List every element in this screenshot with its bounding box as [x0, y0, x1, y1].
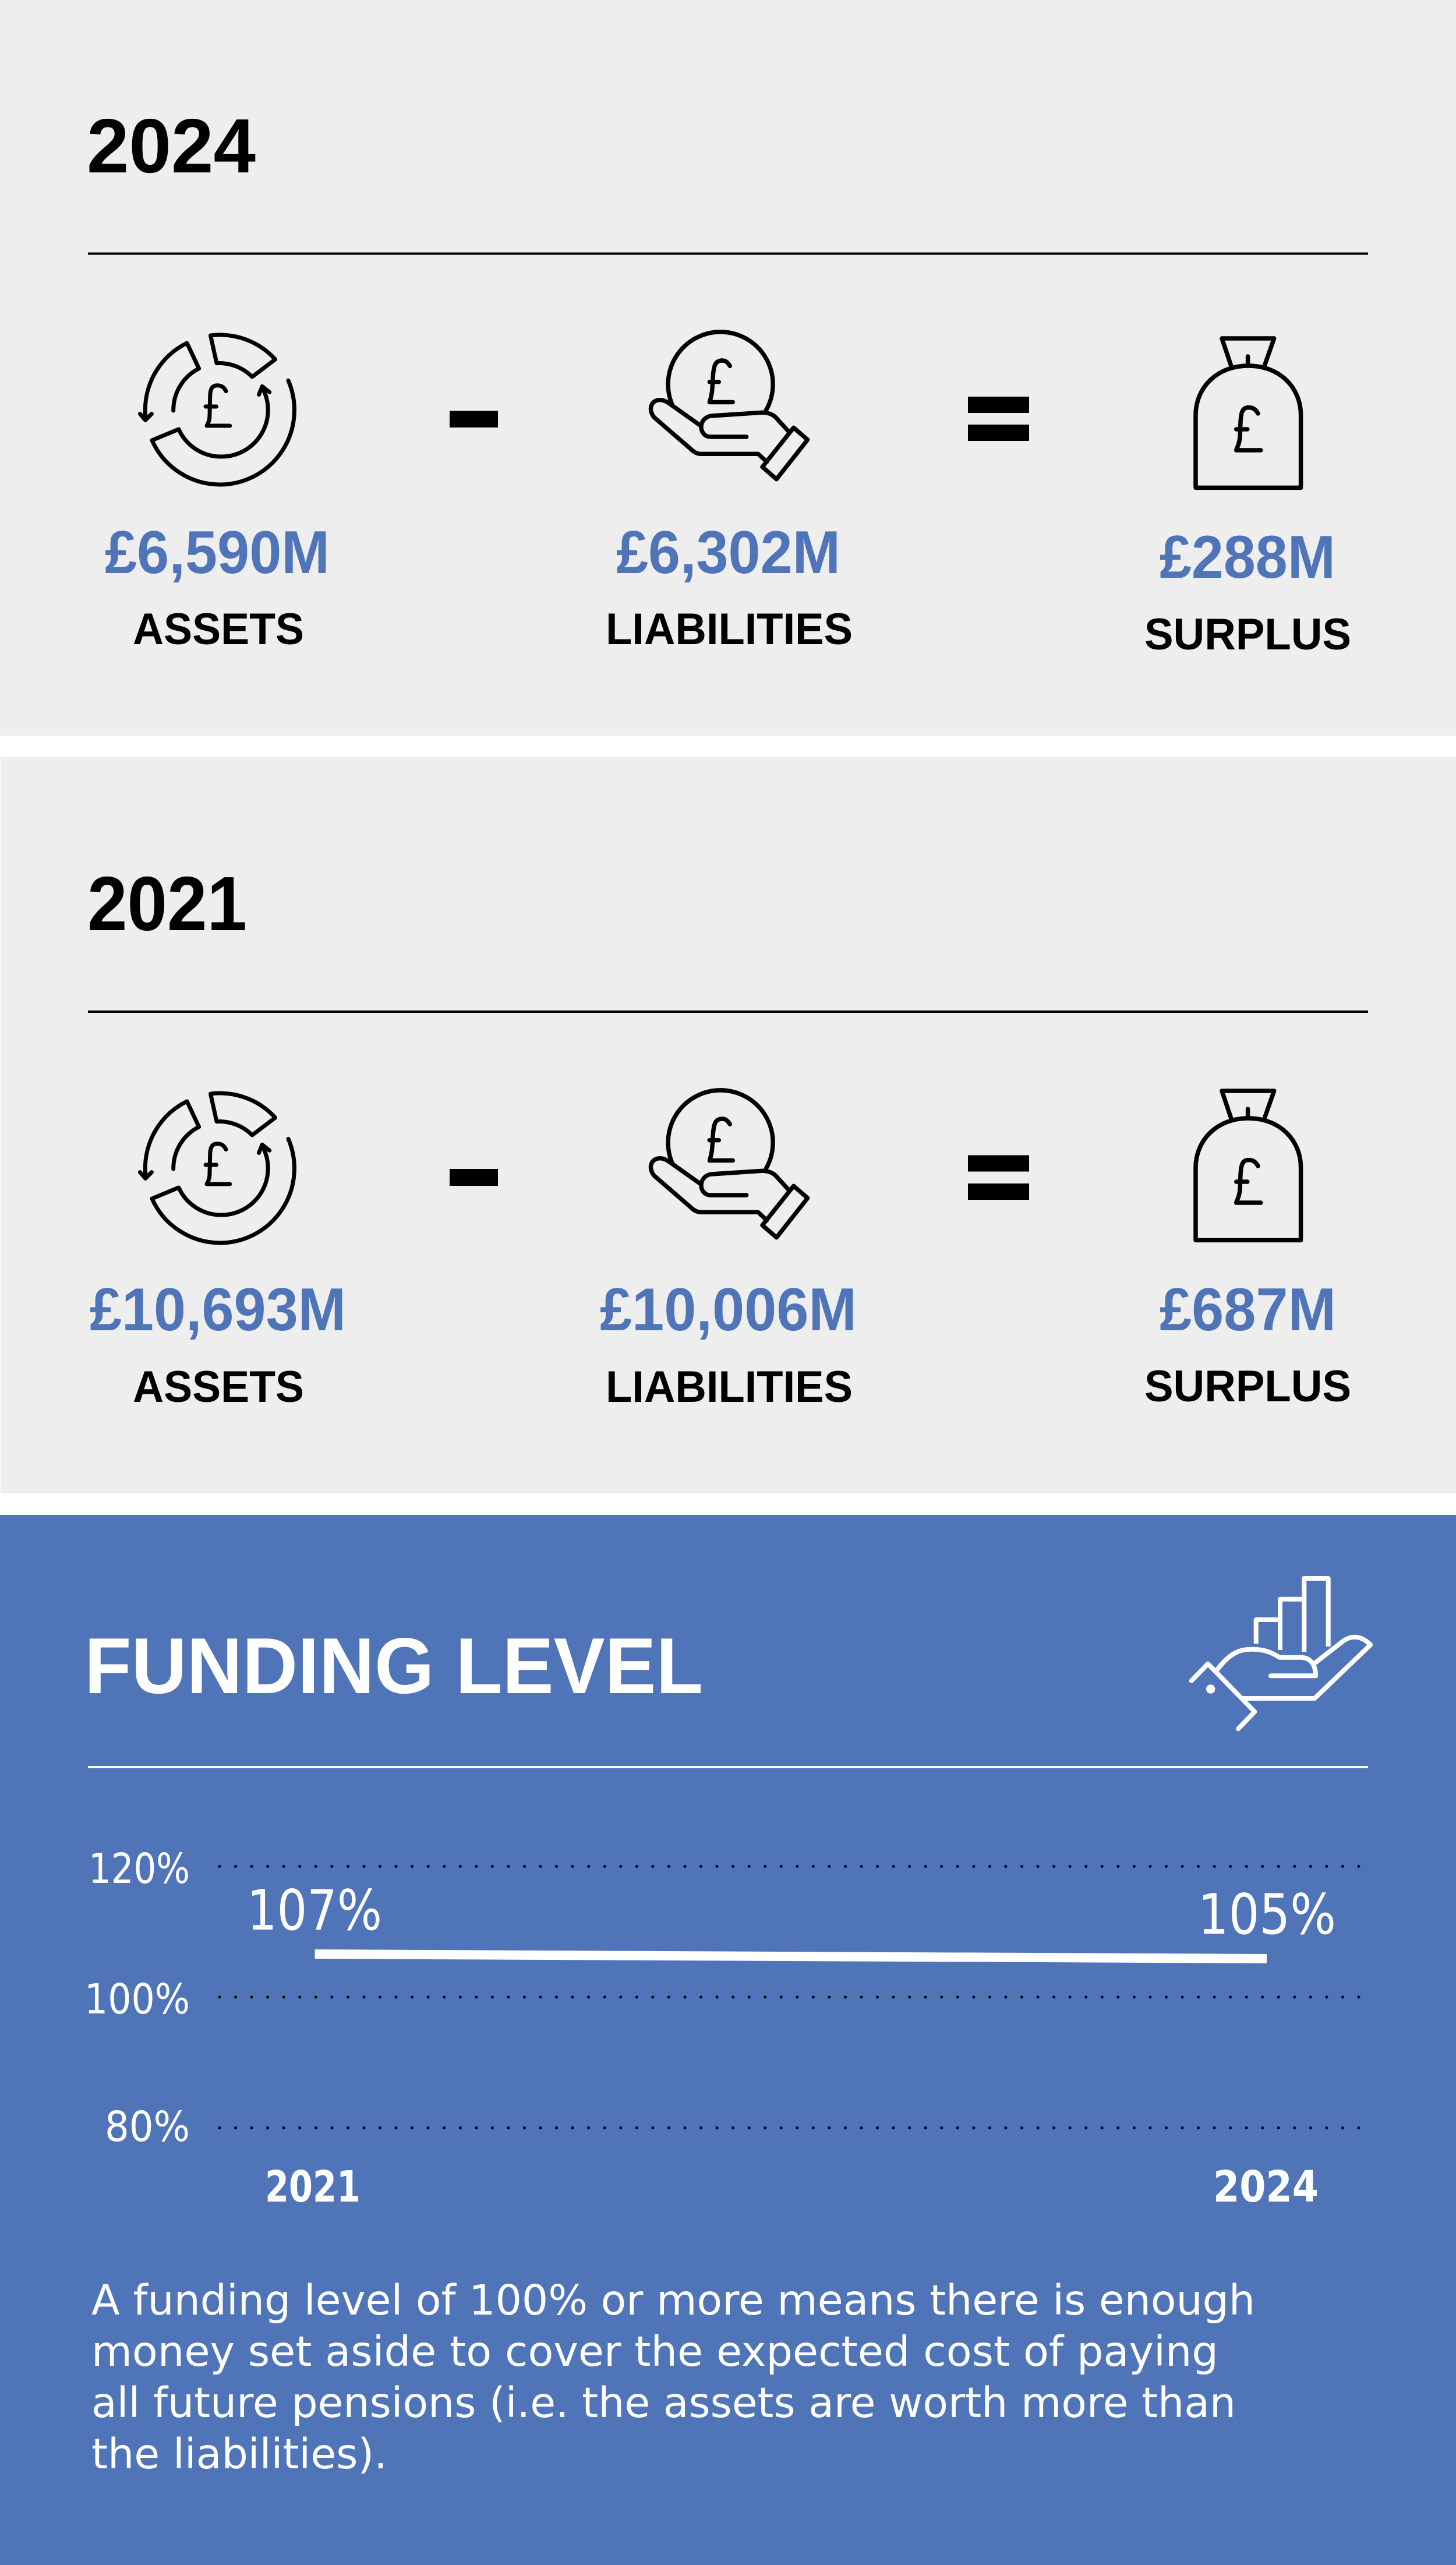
x label: 2021: 2021: [265, 2162, 361, 2212]
value: assets 2021: £10,693M: [90, 1276, 346, 1344]
value: surplus 2021: £687M: [1160, 1276, 1336, 1344]
panel: funding level: [0, 1515, 1456, 2565]
heading: 2021: 2021: [87, 861, 247, 946]
label: liabilities: LIABILITIES: [606, 605, 853, 654]
heading: 2024: 2024: [87, 103, 256, 189]
value: liabilities 2021: £10,006M: [600, 1276, 857, 1344]
icon: money bag: [1196, 1091, 1301, 1240]
value: surplus 2024: £288M: [1160, 524, 1335, 591]
label: surplus: SURPLUS: [1144, 610, 1351, 659]
icon: assets cycle: [140, 1093, 294, 1243]
icon: hand holding pound coin: [651, 1090, 808, 1238]
text block: explanation: money set aside to cover the expected cost of paying: [91, 2327, 1218, 2376]
label: assets: ASSETS: [133, 605, 304, 654]
line chart: funding level: [84, 1845, 1360, 2212]
minus sign: [450, 411, 498, 428]
equals sign: [968, 397, 1029, 441]
text block: explanation: [91, 2276, 1255, 2478]
equals sign: [968, 1156, 1029, 1200]
panel: 2024: [0, 0, 1456, 736]
icon: assets cycle: [140, 335, 294, 485]
value: assets 2024: £6,590M: [105, 519, 330, 587]
value: 105%: 105%: [1198, 1883, 1336, 1947]
text block: explanation: all future pensions (i.e. the assets are worth more than: [91, 2379, 1236, 2427]
panel: 2021: [1, 757, 1456, 1493]
value: liabilities 2024: £6,302M: [616, 519, 840, 587]
axis label: 120%: 120%: [89, 1845, 190, 1893]
icon: money bag: [1196, 338, 1301, 487]
x label: 2024: 2024: [1213, 2162, 1319, 2212]
minus sign: [450, 1169, 498, 1186]
label: assets: ASSETS: [133, 1362, 304, 1412]
text block: explanation: the liabilities).: [91, 2430, 387, 2478]
label: liabilities: LIABILITIES: [606, 1362, 853, 1412]
axis label: 100%: 100%: [84, 1975, 190, 2023]
heading: funding level: FUNDING LEVEL: [84, 1621, 703, 1710]
icon: hand holding pound coin: [651, 332, 808, 479]
icon: hand holding bar chart: [1192, 1578, 1370, 1729]
axis label: 80%: 80%: [105, 2103, 190, 2151]
data line: 107% to 105%: [315, 1949, 1267, 1963]
text block: explanation: A funding level of 100% or more means there is enough: [91, 2276, 1255, 2324]
label: surplus: SURPLUS: [1144, 1362, 1351, 1411]
value: 107%: 107%: [247, 1879, 382, 1943]
